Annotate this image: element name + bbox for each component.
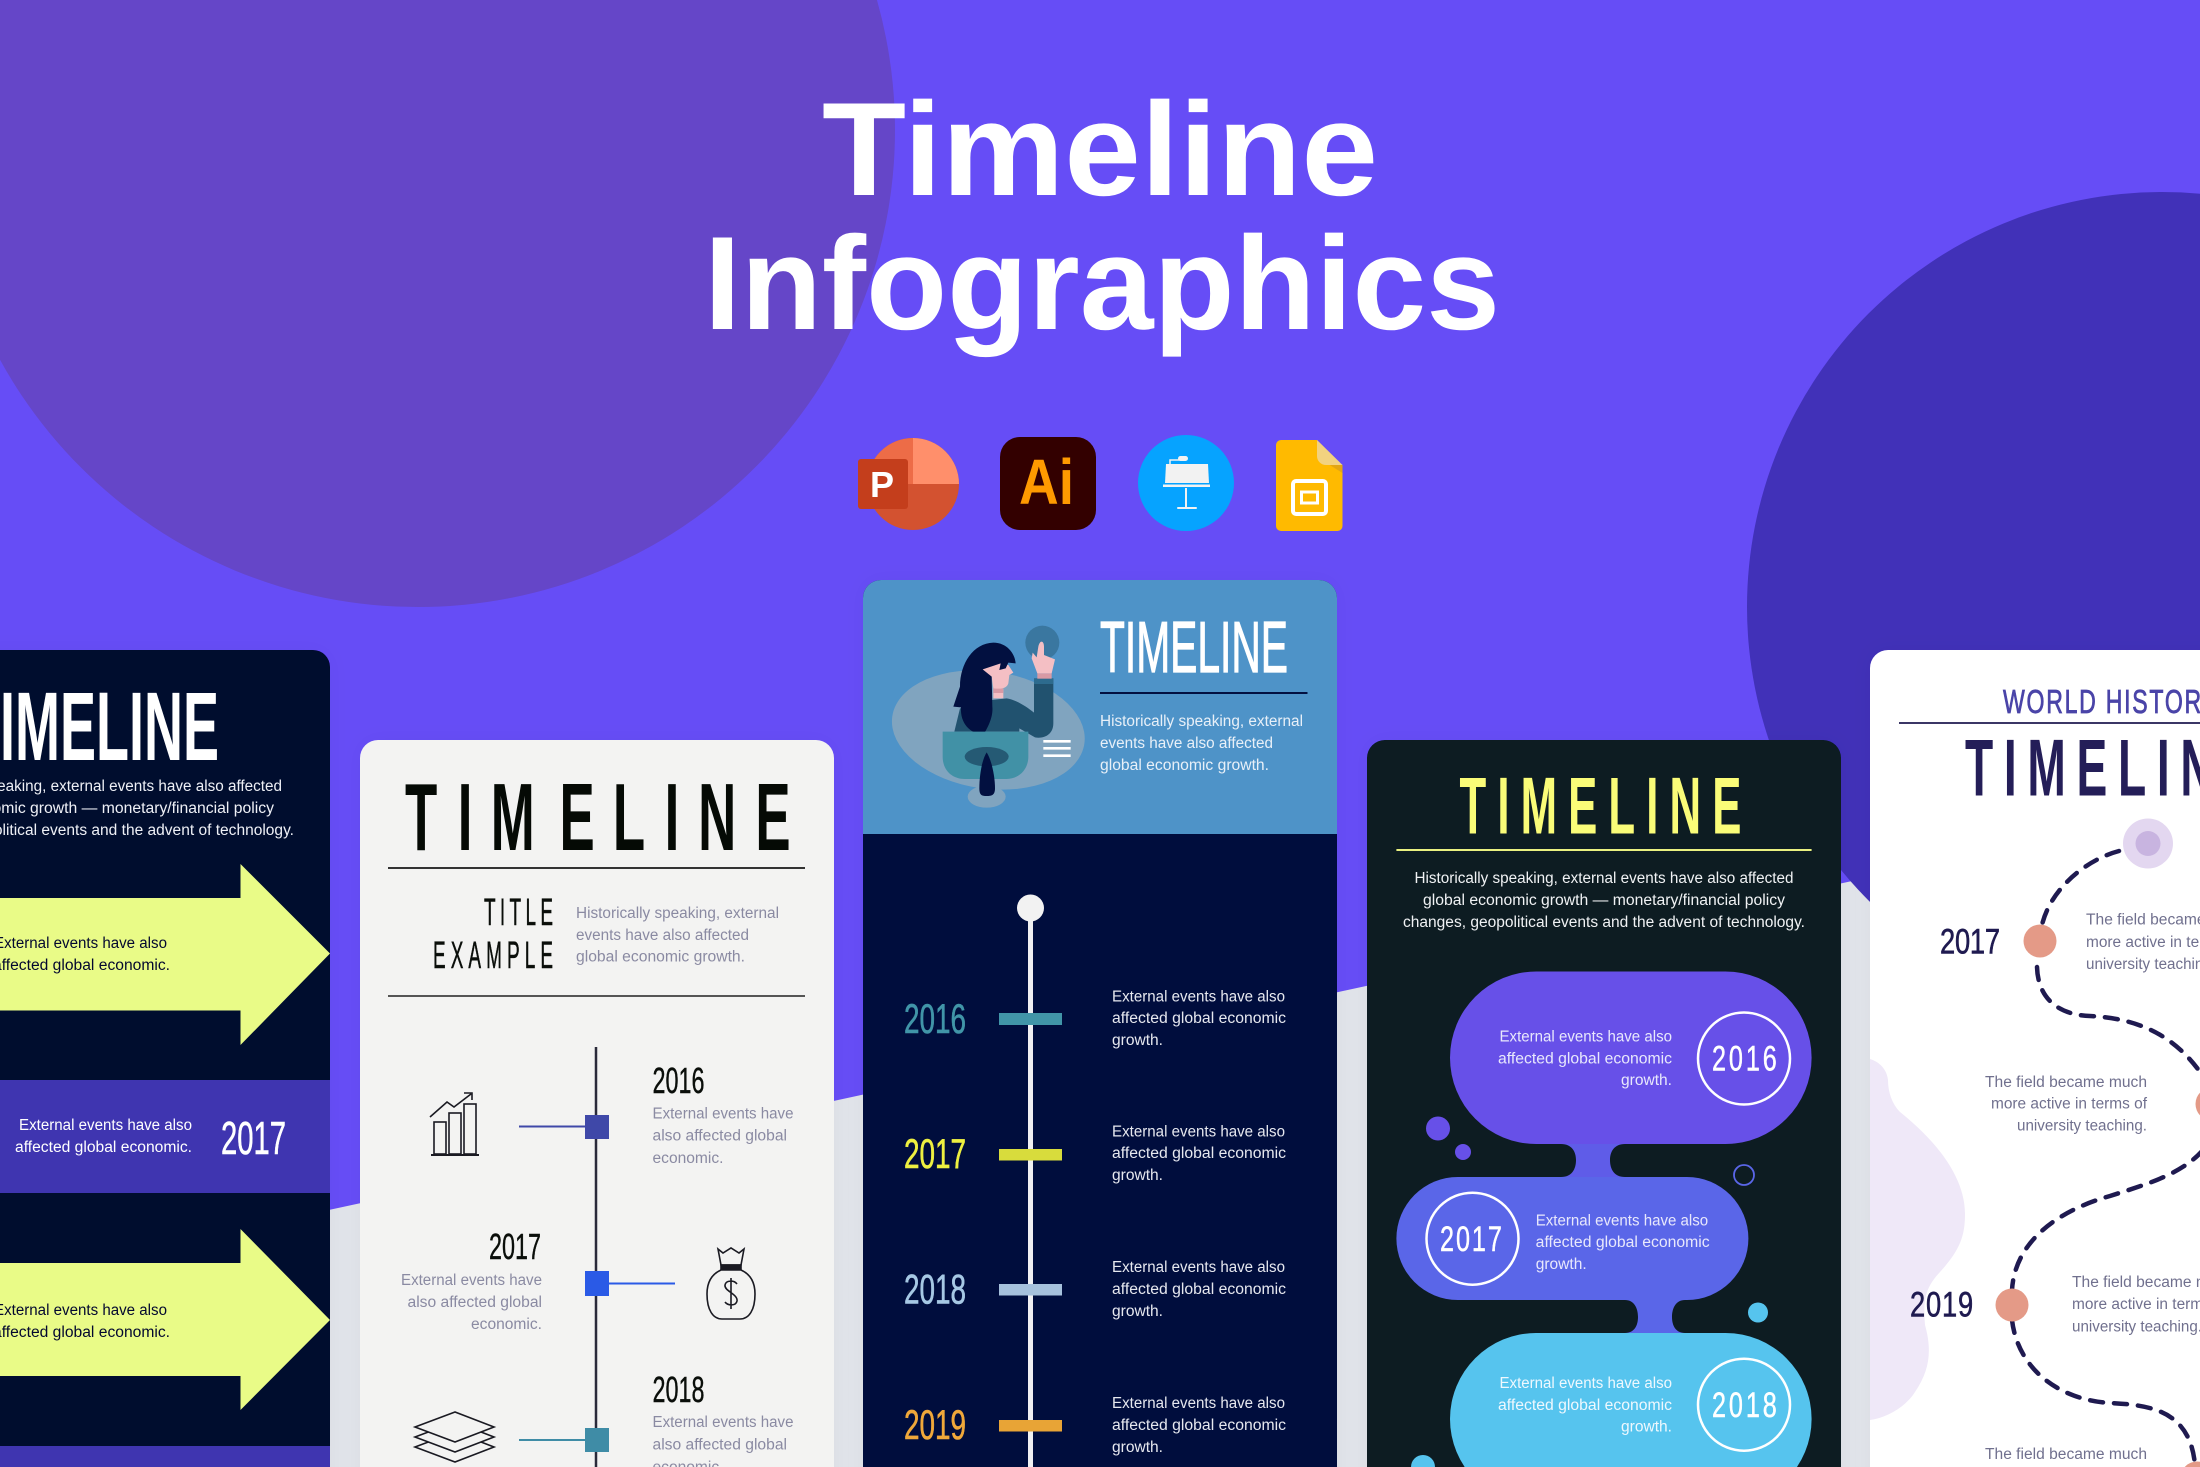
vertical timeline [519,1047,675,1467]
bubble 2018: 2018 [1712,1386,1777,1425]
entry 2019: growth. [1112,1439,1163,1456]
band 2017 [0,1080,330,1193]
center card intro text: global economic growth. [1100,757,1269,774]
bubble 2017: External events have also [1536,1212,1708,1230]
entry 2016: External events have [652,1106,794,1122]
entry 2017: economic. [471,1316,542,1333]
entry 2018: External events have [652,1414,794,1431]
bubble 2016: External events have also [1500,1029,1672,1046]
bubbles card intro text: global economic growth — monetary/financial policy [1423,892,1785,909]
entry 2017: External events have also [1112,1124,1285,1140]
bubble 2018: affected global economic [1498,1397,1672,1414]
subtitle [433,892,553,977]
entry 2019 [904,1395,1286,1456]
text block 2: more active in terms of [1991,1096,2148,1112]
text block 2 [1985,1074,2148,1135]
center card intro text: Historically speaking, external [1100,713,1303,730]
panel: light card [360,740,834,1467]
entry 2017: affected global economic [1112,1145,1286,1162]
entry 2016: External events have also [1112,988,1285,1005]
background: large circle top-left [0,0,895,607]
panel: dark bubbles card [1367,740,1841,1467]
text block 3 [2072,1274,2200,1336]
subtitle description [576,905,779,966]
arrow 2018 [0,1229,330,1410]
panel: left dark arrows card [0,650,330,1467]
bubble 2017 [1396,1177,1748,1300]
bubble 2018 [1450,1333,1812,1467]
background: grey floor [0,875,2200,1467]
bubbles card intro text [1403,870,1805,931]
connector necks [1561,1144,1685,1333]
bubble 2016: growth. [1621,1072,1672,1089]
icon: Illustrator: Ai [1019,446,1074,518]
center card intro text: events have also affected [1100,735,1273,752]
entry 2016: affected global economic [1112,1010,1286,1027]
band 2017: affected global economic. [15,1139,192,1156]
entry 2016 [652,1060,794,1167]
bubble 2016 [1450,972,1812,1144]
bubbles card intro text: changes, geopolitical events and the advent of technology. [1403,914,1805,931]
subtitle: TITLE [484,892,553,934]
text block 2: university teaching. [2017,1118,2147,1135]
illustration: woman at monitor [884,626,1093,808]
band bottom [0,1446,330,1467]
bubble 2016: affected global economic [1498,1051,1672,1068]
band 2017: External events have also [19,1117,192,1134]
entry 2016: growth. [1112,1032,1163,1049]
subtitle description: events have also affected [576,927,749,944]
icon: PowerPoint [858,438,959,530]
light card heading: TIMELINE [405,764,791,871]
bubble 2017: affected global economic [1536,1234,1710,1251]
year 2019: 2019 [1910,1285,1973,1325]
icon: Google Slides [1276,440,1342,531]
icon: money bag [707,1248,755,1319]
left card intro text [0,778,294,839]
text block 2: The field became much [1985,1074,2147,1091]
bubble 2018: External events have also [1500,1375,1672,1392]
entry 2017: also affected global [408,1294,542,1311]
entry 2018: growth. [1112,1303,1163,1320]
subtitle: EXAMPLE [433,935,553,977]
entry 2019: 2019 [904,1401,966,1448]
entry 2017 [904,1124,1286,1184]
background: circle right [1747,192,2200,1022]
center card intro text [1100,713,1303,774]
subtitle description: global economic growth. [576,948,745,966]
icon: Illustrator [1000,437,1096,530]
panel: center card [863,580,1337,1467]
decorative dots [1411,1116,1768,1467]
entry 2017: External events have [401,1272,542,1289]
start marker [2123,818,2173,868]
entry 2018 [904,1259,1286,1320]
icon: Keynote [1138,435,1234,531]
icon: bar chart [430,1093,479,1155]
center card header [863,580,1337,834]
entry 2018: 2018 [652,1369,704,1410]
dashed route [2012,851,2200,1465]
bubble 2016: 2016 [1712,1040,1777,1079]
arrow 2016 [0,864,330,1045]
bubbles card intro text: Historically speaking, external events have also affected [1414,870,1794,887]
stop markers [1996,924,2200,1467]
center card heading: TIMELINE [1100,607,1288,688]
title [704,76,1500,358]
year 2017: 2017 [1940,922,2000,961]
band 2017: 2017 [221,1112,286,1164]
bubbles card heading: TIMELINE [1460,760,1741,851]
subtitle description: Historically speaking, external [576,905,779,922]
entry 2017: growth. [1112,1167,1163,1184]
entry 2016 [904,988,1286,1049]
text block 1 [2086,912,2200,973]
panel: white world history card [1870,650,2200,1467]
entry 2016: 2016 [652,1060,704,1101]
entry 2016: 2016 [904,995,966,1042]
entry 2016: economic. [652,1150,724,1167]
title: Timeline [822,76,1378,224]
title: Infographics [704,210,1500,358]
text block 4: The field became much [1985,1446,2147,1463]
entry 2018 [652,1369,794,1467]
icon: layers [415,1412,494,1462]
entry 2018: 2018 [904,1266,966,1312]
entry 2018: affected global economic [1112,1281,1286,1298]
entry 2018: External events have also [1112,1259,1285,1276]
entry 2018: also affected global [652,1436,787,1454]
entry 2019: affected global economic [1112,1417,1286,1434]
bubble 2018: growth. [1621,1419,1672,1436]
entry 2017: 2017 [489,1226,541,1267]
icon: PowerPoint: P [870,464,894,505]
entry 2019: External events have also [1112,1395,1285,1412]
blob [1870,1059,1965,1420]
entry 2017: 2017 [904,1130,966,1177]
vertical timeline with knob [999,894,1062,1467]
bubble 2017: growth. [1536,1256,1587,1273]
entry 2016: also affected global [652,1128,787,1145]
entry 2017 [401,1226,542,1333]
bubble 2017: 2017 [1440,1220,1502,1259]
